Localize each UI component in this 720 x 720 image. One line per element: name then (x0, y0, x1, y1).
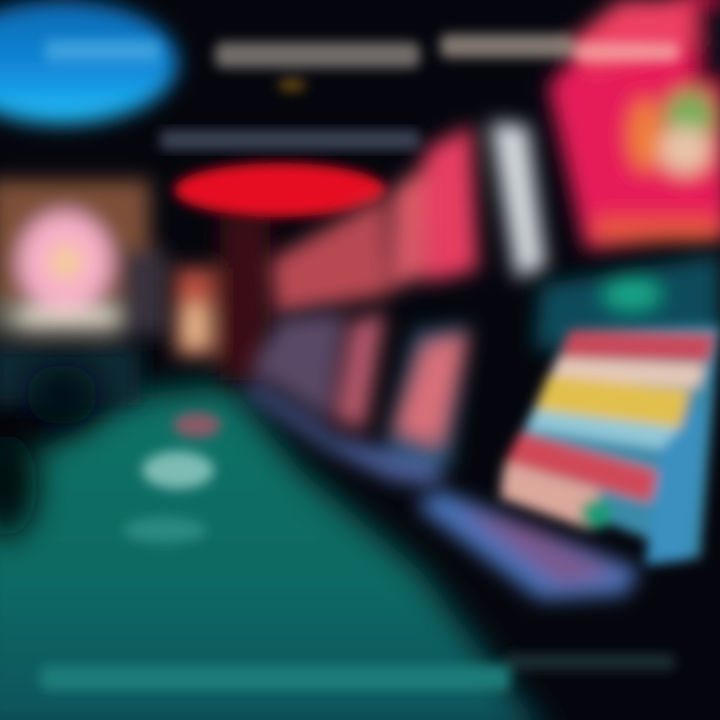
subtitle text line (160, 130, 420, 150)
left wall with flower display (0, 180, 168, 405)
left shadow figure (0, 365, 98, 537)
central column panel (175, 215, 270, 380)
right machine keyboard (415, 490, 640, 600)
floor (0, 385, 550, 720)
title: blue badge (0, 0, 178, 124)
middle machines (245, 312, 470, 488)
right upper machine teal band (535, 255, 720, 350)
footer caption text (40, 654, 675, 691)
red ceiling canopy (174, 163, 386, 217)
upper salmon screens (270, 122, 546, 315)
right main machine screen (500, 325, 720, 565)
top right pink panel (548, 0, 720, 250)
floor sign text (123, 412, 221, 543)
title text line (45, 34, 680, 91)
